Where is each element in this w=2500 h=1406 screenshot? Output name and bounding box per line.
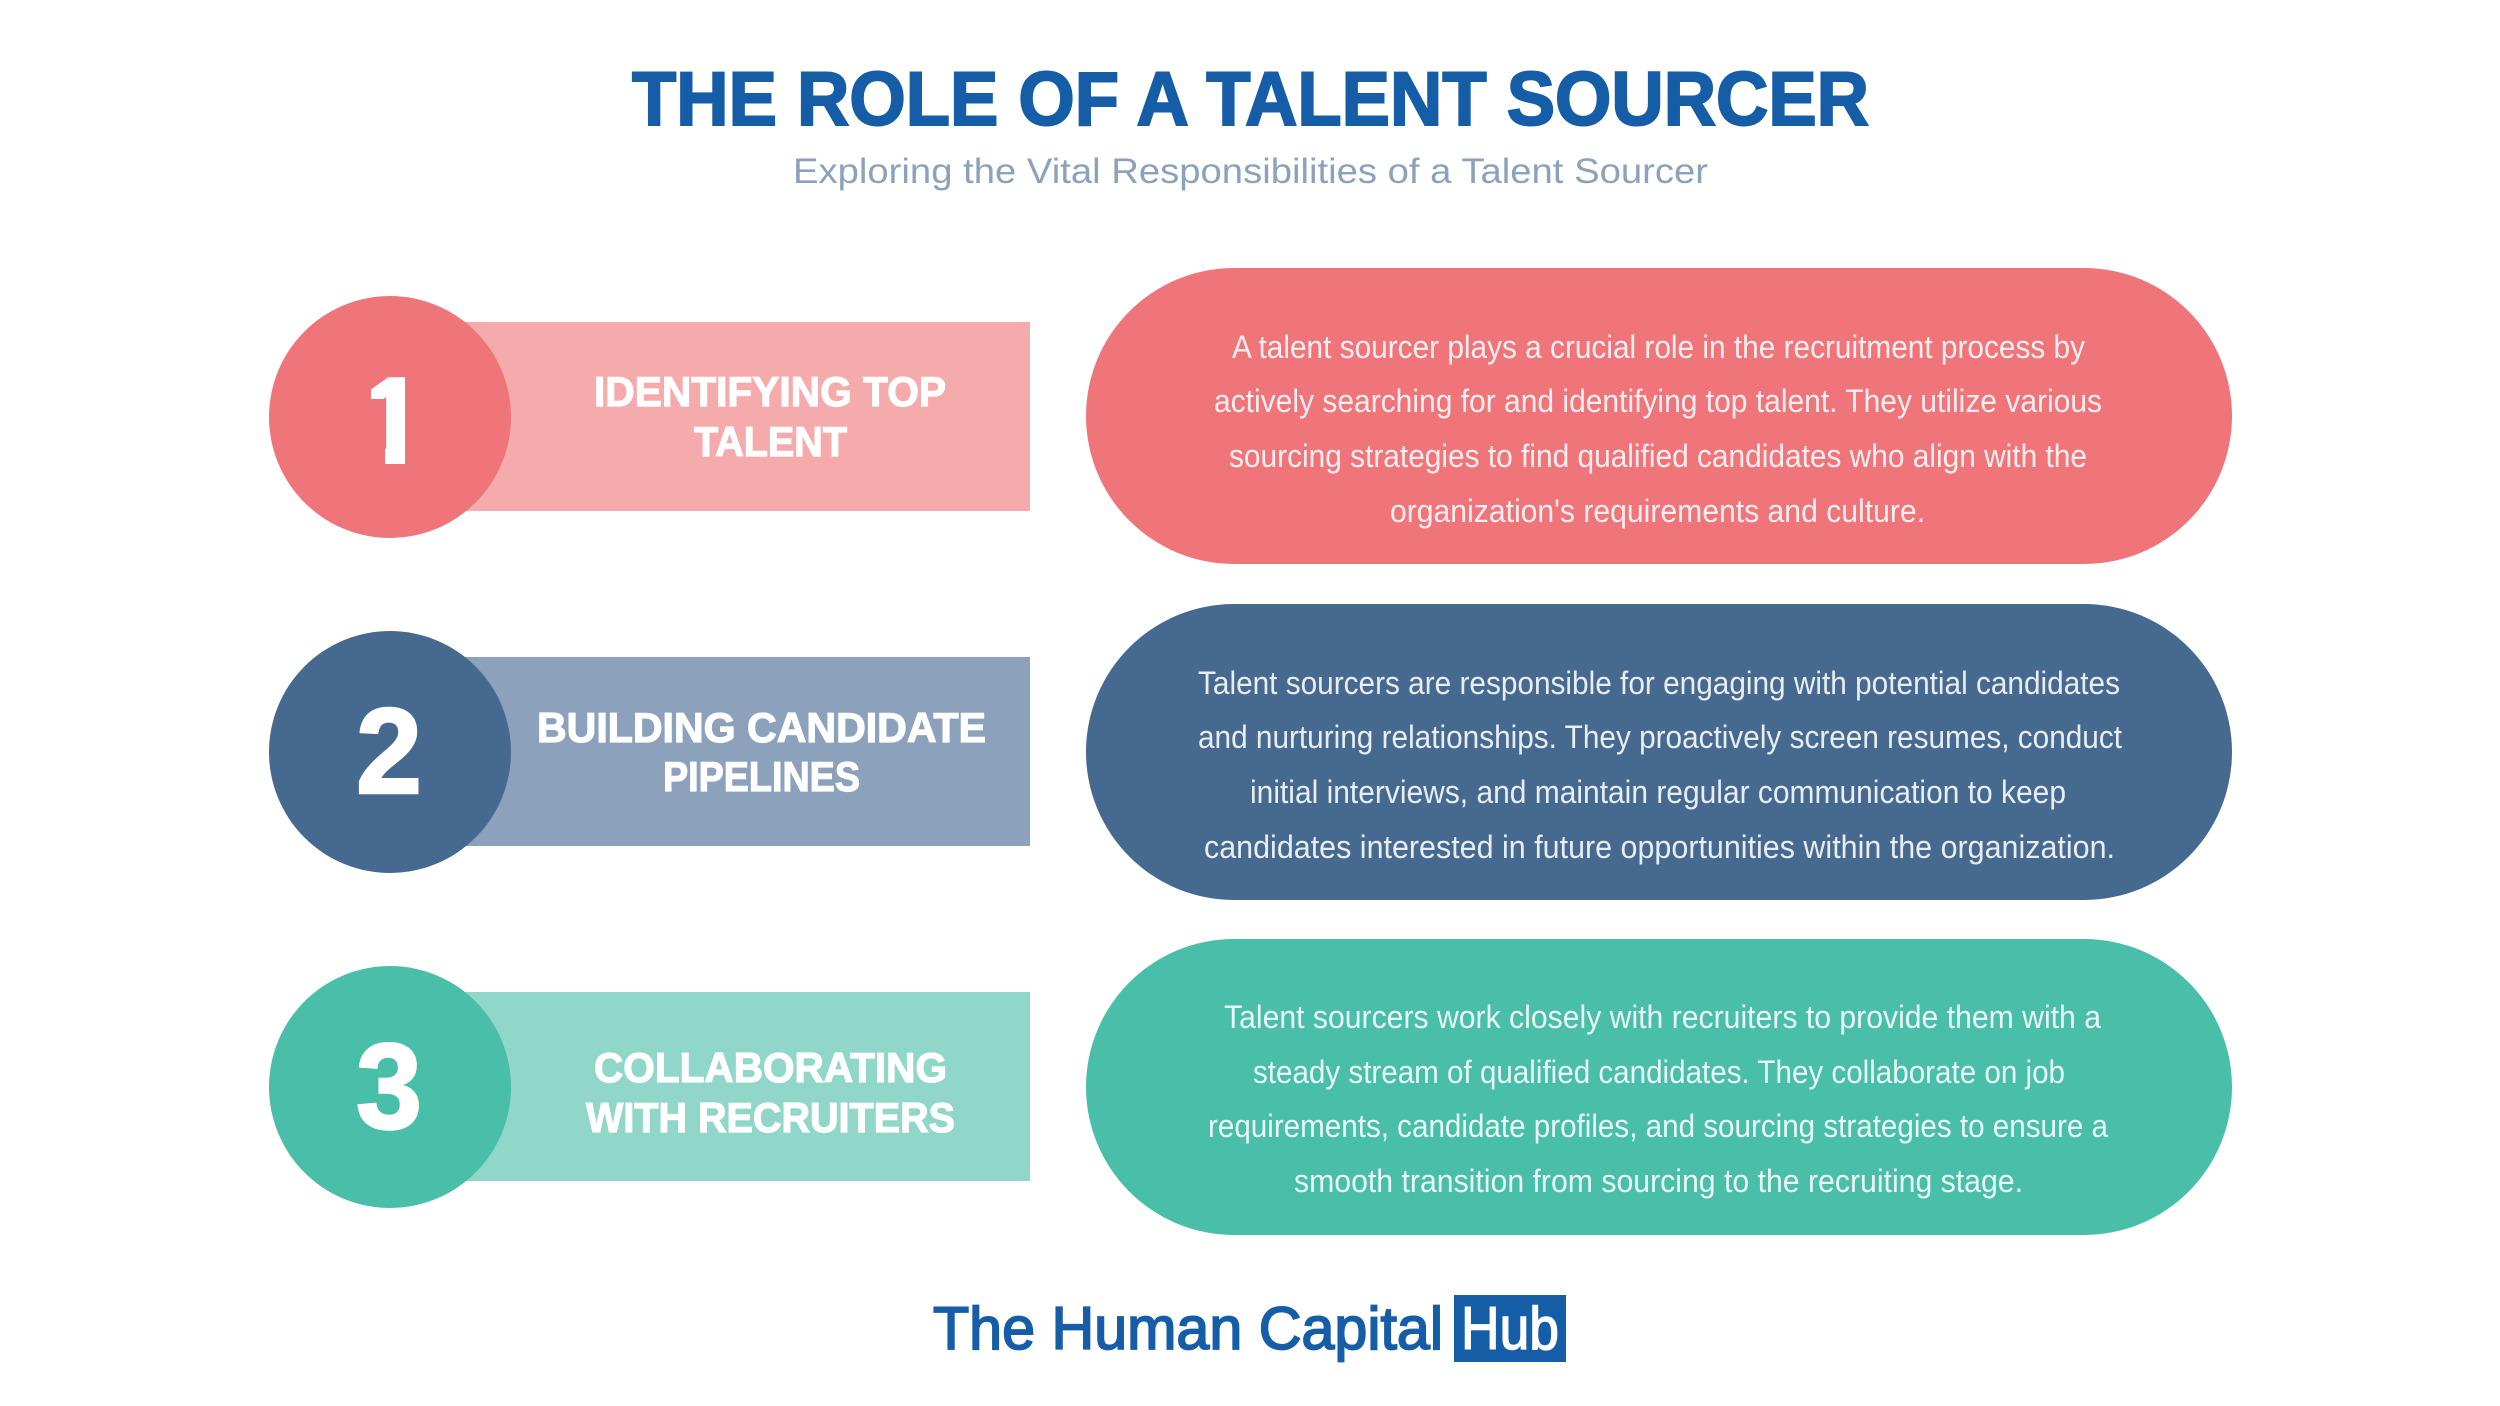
heading banner 1 [390,322,1030,511]
row 1: identifying top talent [269,268,2232,564]
description text 1 [1214,329,2102,529]
description text 3: Talent sourcers work closely with recruiters to provide them with a [1224,999,2101,1035]
title: THE ROLE OF A TALENT SOURCER [632,57,1869,142]
number 2: 2 [356,683,422,819]
description text 2 [1198,665,2122,865]
number 3: 3 [356,1018,422,1154]
heading banner 2 [390,657,1030,846]
description text 2: and nurturing relationships. They proactively screen resumes, conduct [1198,719,2122,755]
row 3: collaborating with recruiters [269,939,2232,1235]
description text 1: sourcing strategies to find qualified candidates who align with the [1229,438,2087,474]
description text 1: actively searching for and identifying top talent. They utilize various [1214,383,2102,419]
heading 2: PIPELINES [663,753,860,800]
description pill 1 [1086,268,2232,564]
description text 3: smooth transition from sourcing to the recruiting stage. [1294,1163,2023,1199]
description text 3: requirements, candidate profiles, and sourcing strategies to ensure a [1208,1108,2108,1144]
description pill 2 [1086,604,2232,900]
description text 1: A talent sourcer plays a crucial role in the recruitment process by [1232,329,2085,365]
logo box [1454,1295,1566,1362]
row 2: building candidate pipelines [269,604,2232,900]
description text 3: steady stream of qualified candidates. They collaborate on job [1253,1054,2065,1090]
subtitle: Exploring the Vital Responsibilities of a Talent Sourcer [793,152,1708,191]
description text 1: organization's requirements and culture. [1390,493,1925,529]
description text 3 [1208,999,2108,1199]
description text 2: Talent sourcers are responsible for engaging with potential candidates [1198,665,2120,701]
heading 1: TALENT [694,418,847,465]
heading 3: COLLABORATING [594,1044,947,1091]
number circle 2 [269,631,511,873]
heading 1: IDENTIFYING TOP [594,368,946,415]
heading 2: BUILDING CANDIDATE [537,704,986,751]
heading 3: WITH RECRUITERS [586,1094,955,1141]
description text 2: candidates interested in future opportunities within the organization. [1204,829,2115,865]
logo: The Human Capital Hub [933,1295,1566,1362]
number 1: 1 [362,353,424,489]
description text 2: initial interviews, and maintain regular communication to keep [1250,774,2066,810]
number circle 3 [269,966,511,1208]
logo box text: Hub [1461,1295,1559,1362]
heading 1 [594,368,946,465]
heading 3 [586,1044,955,1141]
number circle 1 [269,296,511,538]
description pill 3 [1086,939,2232,1235]
heading banner 3 [390,992,1030,1181]
heading 2 [537,704,986,800]
logo wordmark: The Human Capital [933,1295,1443,1362]
